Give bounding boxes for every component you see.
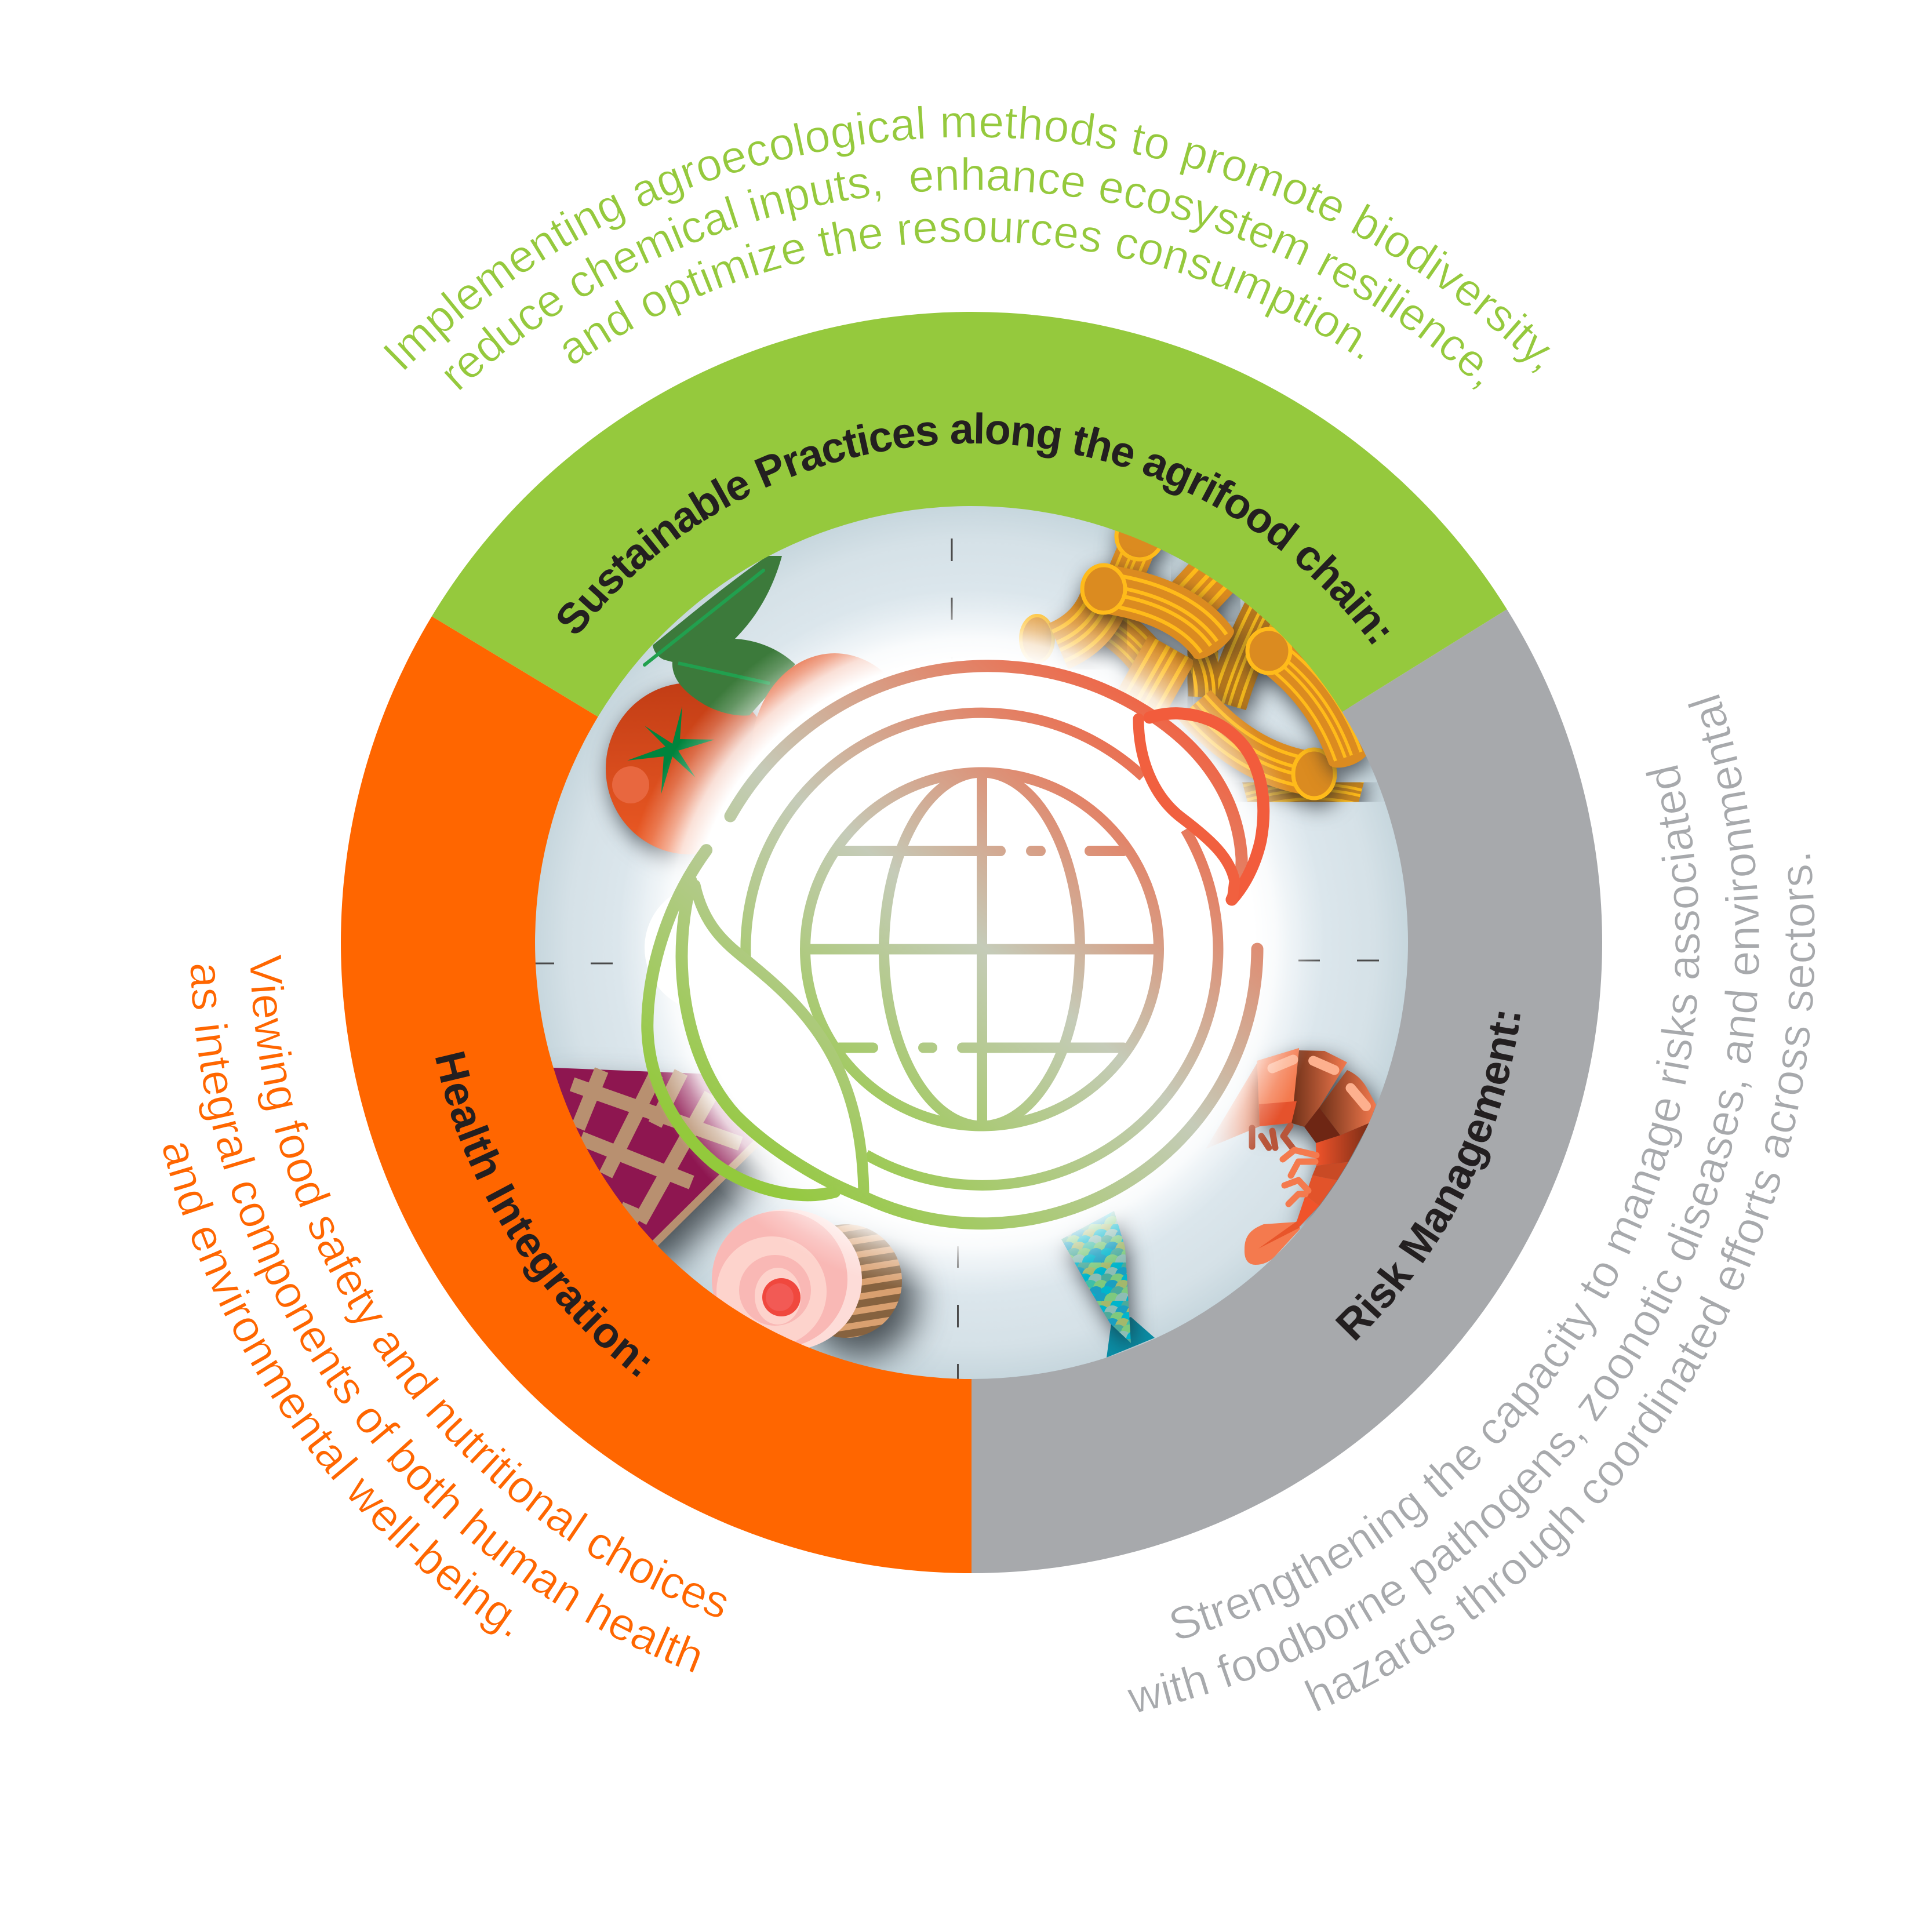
orange leaf outer edge	[1149, 714, 1264, 900]
shrimp highlights	[1272, 1060, 1366, 1106]
shrimp head	[1206, 1061, 1261, 1149]
pie lattice	[572, 1070, 741, 1221]
pie slice body	[539, 1067, 758, 1246]
ring segment: orange	[341, 616, 972, 1573]
pasta left faded cap	[1021, 616, 1053, 662]
fish scaled body	[1061, 1211, 1131, 1343]
pasta tube upper right	[1188, 565, 1223, 603]
text block: risk management: with foodborne pathogens, zoonotic diseases, and environmental	[1123, 688, 1769, 1723]
tomato main body	[606, 683, 774, 854]
text block: health integration: Viewing food safety and nutritional choices	[240, 954, 737, 1629]
pie crust edge	[652, 1141, 758, 1246]
leaf two rib	[678, 663, 770, 683]
meat roll inner light	[755, 1268, 801, 1325]
globe meridians	[805, 772, 1159, 1126]
heading: sustainable practices: Sustainable Practices along the agrifood chain:	[558, 412, 1389, 645]
green leaf outer edge	[647, 850, 835, 1195]
meat roll light spiral	[716, 1236, 827, 1347]
pasta tube centre right	[1226, 600, 1269, 704]
food: pasta	[1021, 513, 1371, 798]
pasta tube middle	[1195, 643, 1210, 697]
pasta tube top	[1116, 513, 1163, 580]
tomato second lobe	[751, 653, 918, 854]
pasta tube right	[1247, 629, 1371, 772]
pasta tube behind left	[1090, 614, 1159, 678]
food: fish tail	[1061, 1211, 1155, 1358]
plate white rim highlight	[645, 884, 772, 1012]
meat roll inner pink	[739, 1255, 811, 1326]
pasta tube main arch	[1082, 565, 1238, 664]
globe outline	[805, 772, 1159, 1126]
leaf one rib	[645, 570, 763, 665]
heading: risk management: Risk Management:	[1335, 1012, 1520, 1341]
text block: health integration: as integral components of both human health	[180, 961, 711, 1683]
plate tick marks	[534, 539, 1379, 1382]
food: shrimp	[1206, 1048, 1376, 1265]
ring segment: grey	[972, 609, 1602, 1573]
shrimp body	[1257, 1048, 1376, 1229]
text block: sustainable practices: Implementing agroecological methods to promote biodiversity,	[384, 105, 1550, 373]
white centre fade	[618, 589, 1325, 1296]
outer ring top with orange leaf inner edge	[730, 666, 1242, 900]
text block: health integration: and environmental well-being.	[152, 1134, 535, 1647]
shrimp tail	[1245, 1222, 1300, 1265]
outer ring with green leaf inner edge	[682, 881, 1257, 1224]
meat roll side	[791, 1224, 902, 1338]
shrimp lower legs	[1283, 1150, 1316, 1204]
heading: health integration: Health Integration:	[435, 1051, 650, 1377]
fish fin	[1107, 1317, 1155, 1358]
leaf one	[653, 556, 782, 662]
tomato calyx star	[627, 706, 715, 794]
text block: risk management: hazards through coordinated efforts across sectors.	[1297, 849, 1825, 1722]
meat roll pink layer	[712, 1211, 847, 1348]
text block: sustainable practices: and optimize the resources consumption.	[563, 217, 1363, 364]
green leaf vein	[695, 885, 864, 1198]
shrimp upper legs	[1252, 1126, 1293, 1149]
pasta tube left	[1058, 600, 1104, 646]
food: pie slice	[539, 1067, 758, 1246]
ring segment: green	[432, 312, 1507, 716]
tomato highlight	[612, 766, 649, 803]
food: tomato with leaves	[606, 556, 918, 854]
inner ring arcs	[745, 713, 1218, 1185]
plate background	[531, 502, 1412, 1383]
pasta tube centre faded	[1130, 648, 1172, 722]
leaf two	[672, 639, 795, 715]
icon: globe with leaves	[647, 666, 1264, 1224]
food: meat roll	[712, 1209, 902, 1351]
shrimp tail crease	[1258, 1221, 1300, 1249]
pasta tube lower right	[1194, 704, 1335, 798]
meat roll centre	[762, 1278, 801, 1316]
orange leaf vein	[1138, 719, 1235, 900]
text block: sustainable practices: reduce chemical inputs, enhance ecosystem resilience,	[444, 157, 1483, 390]
text block: risk management: Strengthening the capacity to manage risks associated	[1163, 760, 1709, 1651]
meat roll face rim	[712, 1209, 862, 1351]
pasta tube lower back	[1246, 787, 1361, 797]
